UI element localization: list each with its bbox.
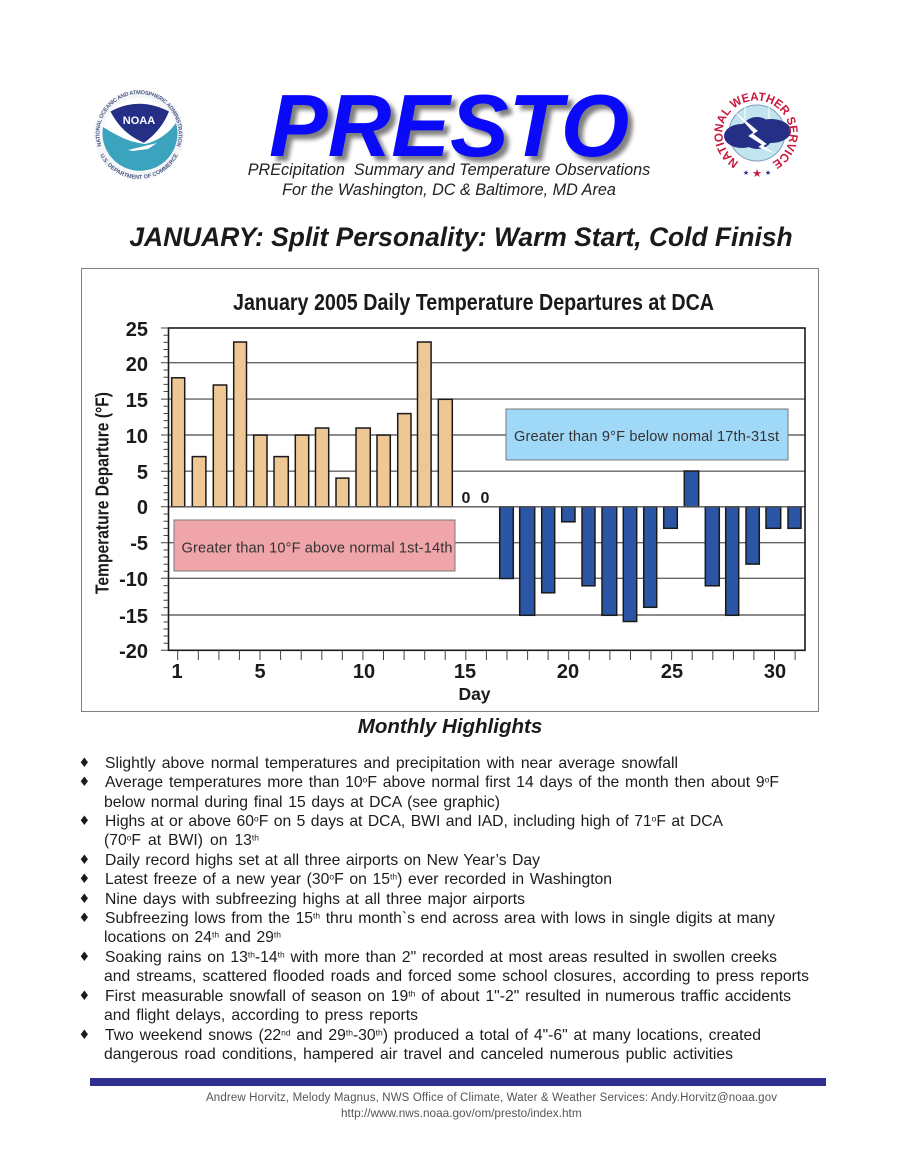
logo: NOAA: NOAA (123, 115, 155, 127)
zero value labels: 0 (481, 490, 490, 507)
logo: National Weather Service: ★ (765, 169, 771, 177)
x axis labels: 20 (557, 661, 579, 683)
x axis labels: 25 (661, 661, 683, 683)
x axis title: Day (458, 684, 491, 704)
wordmark: PRESTO: PRESTO (269, 76, 629, 175)
chart title: January 2005 Daily Temperature Departures at DCA (233, 289, 714, 315)
text: Two weekend snows (22nd and 29th-30th) produced a total of 4"-6" at many locations, created (105, 1026, 761, 1044)
footer rule (90, 1078, 826, 1086)
main title: JANUARY: Split Personality: Warm Start, Cold Finish (129, 222, 793, 252)
text: locations on 24th and 29th (104, 928, 281, 946)
text: ♦ (78, 910, 90, 926)
subtitle: PREcipitation Summary and Temperature Observations (248, 161, 650, 179)
x axis labels: 1 (171, 661, 183, 683)
y axis labels: 5 (137, 462, 148, 484)
callout: cold period (506, 409, 788, 460)
y axis labels: 15 (126, 390, 148, 412)
y axis title: Temperature Departure (°F) (92, 392, 112, 594)
zero value labels: 0 (462, 490, 471, 507)
y axis labels: -5 (130, 533, 148, 555)
text: ♦ (78, 756, 90, 770)
y axis labels: 25 (126, 319, 148, 341)
text: ♦ (78, 988, 90, 1004)
text: (70oF at BWI) on 13th (104, 832, 259, 848)
text: ♦ (78, 814, 90, 828)
logo: National Weather Service: NATIONAL WEATHER SERVICE (714, 92, 798, 169)
warm bars (172, 342, 452, 507)
y axis labels: 0 (137, 497, 148, 519)
text: Subfreezing lows from the 15th thru month`s end across area with lows in single digits at many (105, 910, 775, 926)
logo: National Weather Service: ★ (752, 167, 762, 180)
logo: NOAA: NATIONAL OCEANIC AND ATMOSPHERIC ADMINISTRATION (96, 90, 182, 147)
y axis labels: 10 (126, 426, 148, 448)
text: and flight delays, according to press reports (104, 1006, 418, 1024)
text: ♦ (78, 774, 90, 790)
text: and streams, scattered flooded roads and forced some school closures, according to press reports (104, 968, 809, 984)
text: Soaking rains on 13th-14th with more than 2" recorded at most areas resulted in swollen creeks (105, 948, 777, 966)
text: ♦ (78, 852, 90, 868)
text: Nine days with subfreezing highs at all three major airports (105, 890, 525, 908)
y axis labels: -15 (119, 606, 148, 628)
callout: warm period: Greater than 10°F above normal 1st-14th (182, 540, 452, 556)
heading: Monthly Highlights: Monthly Highlights (358, 715, 542, 738)
text: Slightly above normal temperatures and precipitation with near average snowfall (105, 754, 678, 772)
x axis labels: 30 (764, 661, 786, 683)
text block: highlights list (78, 754, 809, 1062)
y axis labels: 20 (126, 354, 148, 376)
y axis labels: -10 (119, 569, 148, 591)
subtitle: For the Washington, DC & Baltimore, MD Area (282, 180, 616, 198)
x axis labels: 10 (353, 661, 375, 683)
footer credits: Andrew Horvitz, Melody Magnus, NWS Office of Climate, Water & Weather Services: Andy.Horvitz@noaa.gov (206, 1092, 777, 1104)
cold bars (500, 471, 801, 622)
logo: NOAA (94, 90, 184, 180)
logo: NOAA: U.S. DEPARTMENT OF COMMERCE (100, 153, 178, 179)
y axis labels (119, 319, 148, 663)
callout: cold period: Greater than 9°F below nomal 17th-31st (514, 429, 779, 445)
subtitle (248, 161, 650, 198)
text: Daily record highs set at all three airports on New Year’s Day (105, 852, 540, 868)
text: ♦ (78, 950, 90, 964)
text: First measurable snowfall of season on 19th of about 1"-2" resulted in numerous traffic accidents (105, 988, 791, 1004)
zero value labels (462, 490, 490, 507)
x axis labels: 15 (454, 661, 476, 683)
text: ♦ (78, 1028, 90, 1042)
text: below normal during final 15 days at DCA (see graphic) (104, 794, 500, 810)
logo: National Weather Service: ★ (743, 169, 749, 177)
x axis labels: 5 (254, 661, 266, 683)
text: ♦ (78, 872, 90, 886)
text: ♦ (78, 892, 90, 906)
callout: warm period (174, 520, 455, 571)
x axis labels (171, 661, 786, 683)
text: Average temperatures more than 10oF above normal first 14 days of the month then about 9oF (105, 774, 779, 790)
text: Highs at or above 60oF on 5 days at DCA, BWI and IAD, including high of 71oF at DCA (105, 812, 723, 830)
footer url: http://www.nws.noaa.gov/om/presto/index.htm (341, 1106, 582, 1120)
text: Latest freeze of a new year (30oF on 15th) ever recorded in Washington (105, 870, 612, 888)
y axis labels: -20 (119, 641, 148, 663)
text: dangerous road conditions, hampered air travel and canceled numerous public activities (104, 1046, 733, 1062)
